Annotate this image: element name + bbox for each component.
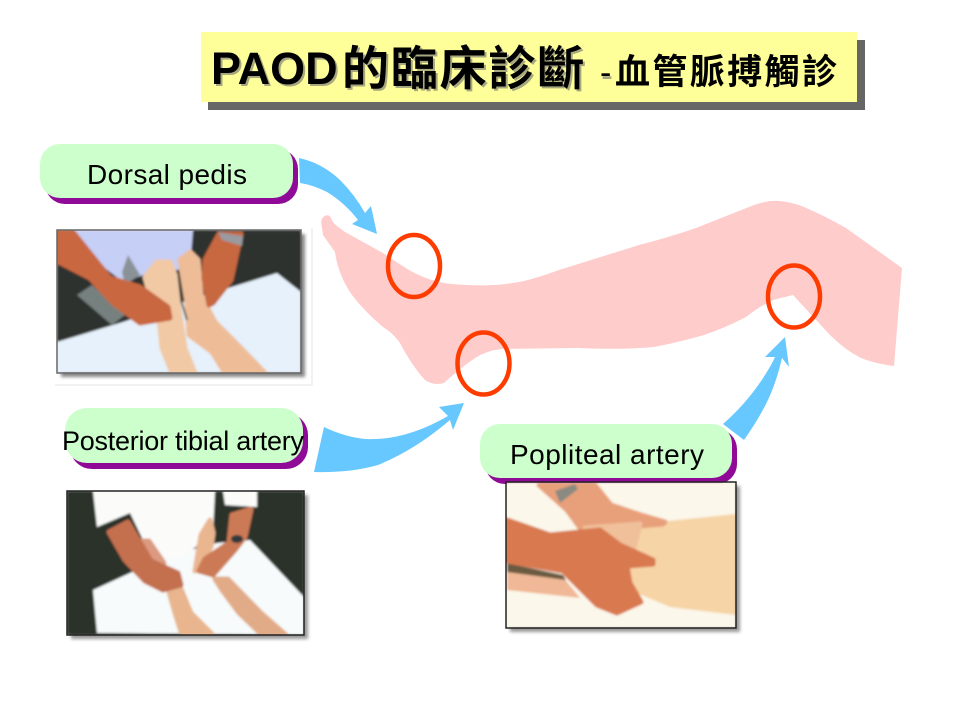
photo: popliteal palpation — [506, 482, 740, 632]
photo frame outline — [55, 228, 312, 385]
title main text: 的臨床診斷 — [344, 44, 588, 97]
title main text: 的臨床診斷 — [342, 42, 586, 95]
title subtitle text: - — [600, 54, 611, 92]
title subtitle text: 血管脈搏觸診 — [615, 53, 839, 92]
label: Posterior tibial artery — [62, 408, 308, 469]
label: Posterior tibial artery: Posterior tibial artery — [62, 426, 304, 456]
photo: posterior tibial palpation — [67, 491, 308, 639]
leg illustration — [321, 201, 902, 384]
label: Popliteal artery: Popliteal artery — [510, 439, 704, 470]
label: Popliteal artery — [480, 424, 737, 484]
label: Dorsal pedis: Dorsal pedis — [87, 159, 247, 190]
pulse circle: posterior tibial — [458, 332, 510, 394]
title banner — [201, 32, 865, 110]
title main text — [211, 42, 588, 97]
title subtitle text: - — [601, 54, 613, 95]
arrow: posterior tibial to ankle — [314, 403, 464, 472]
title main text: PAOD — [211, 43, 338, 94]
label: Dorsal pedis — [40, 144, 298, 204]
title main text: PAOD — [213, 45, 340, 96]
pulse circle: popliteal — [768, 266, 820, 328]
pulse circle: dorsal pedis — [388, 235, 440, 297]
photo: dorsal pedis palpation — [57, 230, 305, 377]
arrow: dorsal pedis to foot — [299, 158, 377, 234]
arrow: popliteal to knee — [723, 337, 789, 440]
